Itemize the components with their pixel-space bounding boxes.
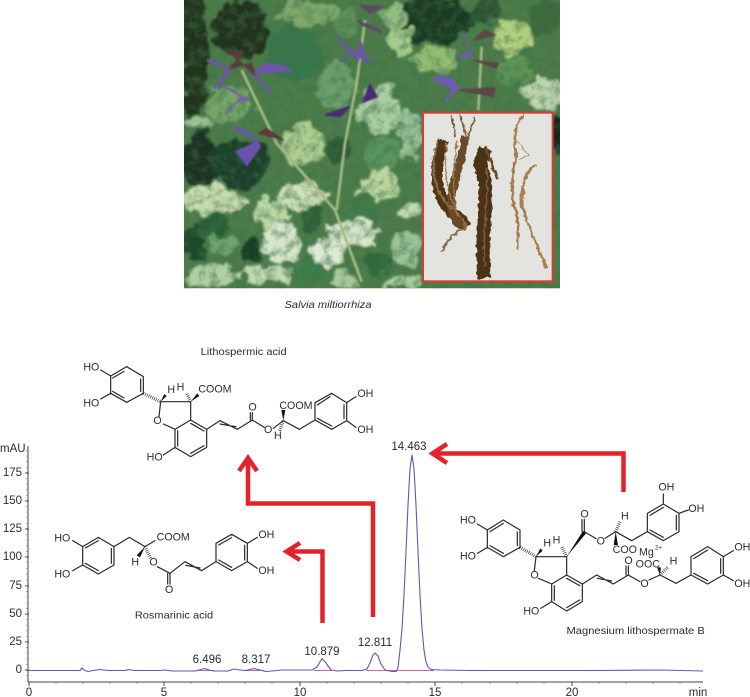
structure: magnesium lithospermate B: Mg — [639, 546, 654, 558]
structure: lithospermic acid: H — [167, 384, 175, 396]
structure: magnesium lithospermate B: O — [640, 578, 649, 590]
structure: magnesium lithospermate B: 2+ — [655, 546, 662, 552]
structure: magnesium lithospermate B: HO — [460, 551, 476, 563]
caption: Salvia miltiorrhiza: Salvia miltiorrhiza — [284, 299, 372, 311]
peak labels: 8.317 — [242, 654, 270, 666]
structure: rosmarinic acid: H — [131, 556, 139, 568]
structure: lithospermic acid: OH — [357, 388, 373, 400]
structure: rosmarinic acid: HO — [54, 568, 70, 580]
photo: Salvia miltiorrhiza plant with root inset — [178, 0, 565, 288]
structure: lithospermic acid: OH — [357, 424, 373, 436]
inset: dried roots in red frame — [423, 113, 553, 281]
trace line — [28, 455, 703, 672]
structure: rosmarinic acid — [54, 529, 274, 621]
y axis: mAU — [0, 443, 26, 455]
structure: magnesium lithospermate B: OH — [734, 541, 750, 553]
y axis: 50 — [9, 608, 22, 620]
structure: lithospermic acid — [83, 347, 373, 463]
x axis — [26, 682, 707, 697]
y axis: 0 — [16, 664, 22, 676]
structure: magnesium lithospermate B: OH — [734, 578, 750, 590]
y axis: 75 — [9, 580, 22, 592]
structure: lithospermic acid: H — [274, 430, 282, 442]
structure: rosmarinic acid: OH — [258, 529, 274, 541]
y axis: 175 — [3, 467, 22, 479]
structure: lithospermic acid: O — [264, 424, 272, 436]
arrow: 12.811 peak to lithospermic acid — [239, 458, 373, 617]
structure: rosmarinic acid: O — [149, 557, 158, 569]
peak labels: 6.496 — [193, 654, 221, 666]
structure: lithospermic acid: O — [153, 415, 162, 427]
chromatogram chart — [0, 441, 707, 697]
structure: lithospermic acid: COOM — [198, 383, 231, 395]
structure: magnesium lithospermate B: H — [543, 537, 551, 549]
integration baseline — [198, 670, 434, 672]
y axis: 25 — [9, 636, 22, 648]
structure: magnesium lithospermate B: O — [624, 555, 633, 567]
structure: magnesium lithospermate B: OH — [658, 481, 674, 493]
peak labels: 12.811 — [358, 637, 392, 649]
y axis: 100 — [3, 551, 22, 563]
arrow: magnesium lithospermate B to 14.463 peak — [432, 444, 624, 492]
structure: rosmarinic acid: O — [165, 584, 173, 596]
structure: magnesium lithospermate B: HO — [460, 515, 476, 527]
structure: lithospermic acid: COOM — [279, 400, 312, 412]
structure: lithospermic acid: H — [177, 381, 184, 393]
structure: magnesium lithospermate B: O — [530, 570, 539, 582]
structure: magnesium lithospermate B: H — [670, 556, 677, 568]
peak labels: 10.879 — [304, 646, 340, 658]
y axis: 150 — [3, 495, 22, 507]
structure: lithospermic acid: HO — [83, 397, 99, 409]
structure: magnesium lithospermate B — [460, 481, 750, 637]
structure: magnesium lithospermate B: COO — [613, 544, 637, 556]
peak labels: 14.463 — [391, 441, 427, 453]
structure: magnesium lithospermate B: H — [621, 511, 629, 523]
structure: magnesium lithospermate B: HO — [523, 606, 539, 618]
structure: magnesium lithospermate B: O — [597, 536, 605, 548]
label: rosmarinic acid: Rosmarinic acid — [135, 610, 213, 621]
structure: lithospermic acid: HO — [83, 361, 99, 373]
structure: lithospermic acid: HO — [147, 451, 163, 463]
structure: rosmarinic acid: OH — [258, 565, 274, 577]
structure: magnesium lithospermate B: OOC — [636, 558, 660, 570]
structure: magnesium lithospermate B: H — [553, 535, 560, 547]
structure: magnesium lithospermate B: OH — [688, 503, 704, 515]
label: lithospermic acid: Lithospermic acid — [201, 347, 287, 358]
structure: rosmarinic acid: COOM — [157, 532, 190, 544]
y axis — [0, 443, 29, 682]
structure: rosmarinic acid: HO — [54, 532, 70, 544]
structure: magnesium lithospermate B: O — [580, 508, 589, 520]
arrow: 10.879 peak to rosmarinic acid — [286, 543, 322, 623]
y axis: 125 — [3, 523, 22, 535]
structure: lithospermic acid: O — [248, 402, 257, 414]
label: magnesium lithospermate B: Magnesium lithospermate B — [566, 626, 705, 637]
peak labels — [193, 441, 427, 666]
